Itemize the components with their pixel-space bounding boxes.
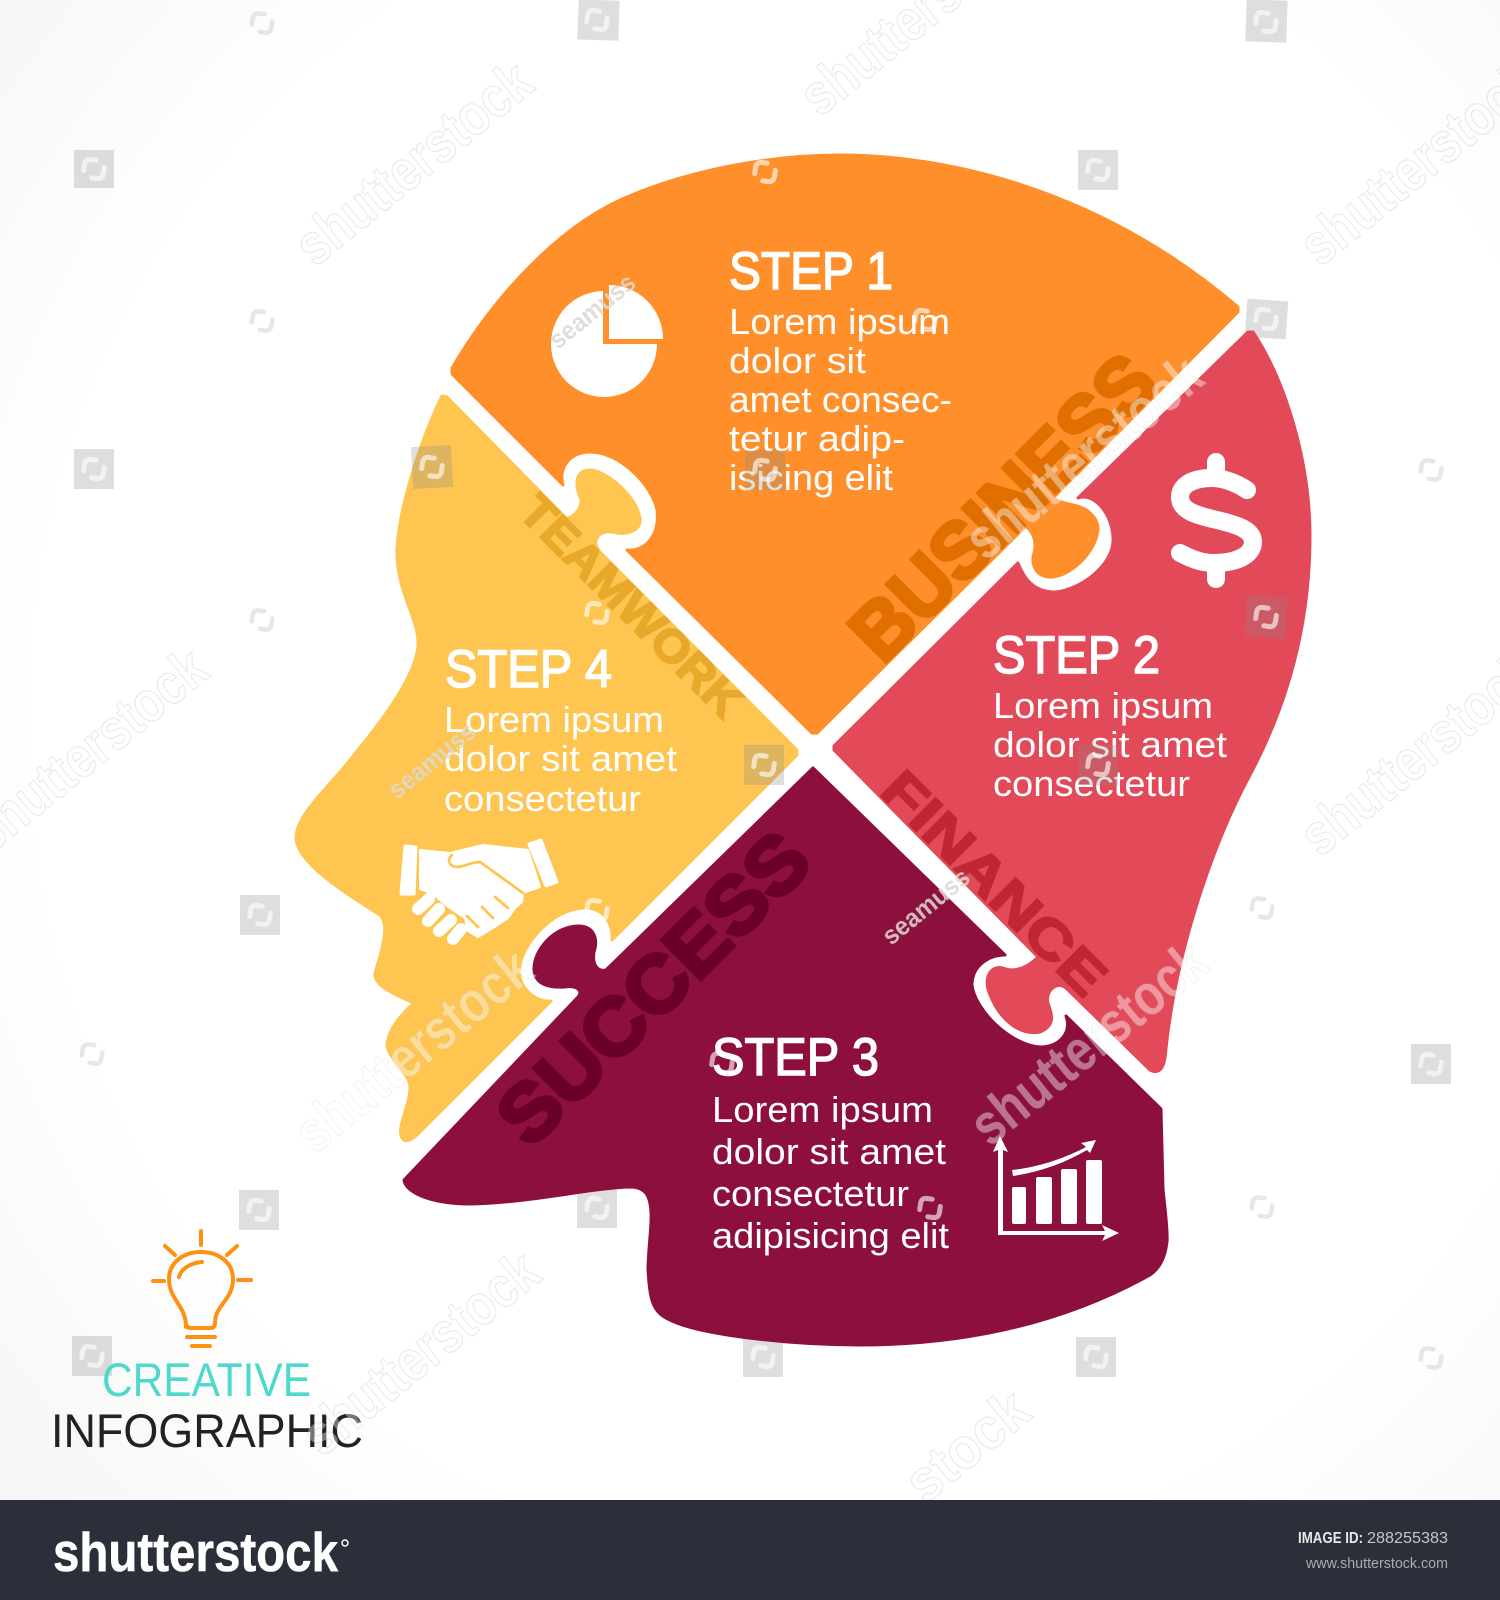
watermark overlay: shutterstock [282, 935, 545, 1165]
text block: step 4 [444, 699, 677, 819]
panel: step 1 orange puzzle piece [452, 155, 1238, 733]
footer logo: shutterstock: shutterstock [53, 1521, 338, 1583]
watermark overlay: stock [892, 1376, 1043, 1515]
label: TEAMWORK: TEAMWORK [510, 484, 753, 728]
panel: step 2 red puzzle piece [834, 332, 1310, 1072]
text block: step 1: Lorem ipsum [729, 301, 950, 342]
text block: step 4: Lorem ipsum [444, 699, 664, 740]
background watermark tiles [72, 0, 1451, 1377]
image id: IMAGE ID: [1298, 1530, 1363, 1547]
text block: step 3: Lorem ipsum [712, 1089, 933, 1130]
heading: step 2: STEP 2 [993, 626, 1160, 685]
heading: step 3: STEP 3 [712, 1028, 879, 1087]
text block: step 1 [729, 301, 952, 498]
logo: creative infographic [51, 1231, 363, 1457]
text block: step 3: adipisicing elit [712, 1215, 949, 1256]
text block: step 2: consectetur [993, 763, 1190, 804]
watermark overlay: seamuss [382, 716, 482, 805]
label: BUSINESS: BUSINESS [832, 336, 1174, 678]
text block: step 3: consectetur [712, 1173, 909, 1214]
watermark overlay: shutterstock [289, 1238, 552, 1468]
label: FINANCE: FINANCE [870, 759, 1118, 1008]
text block: step 3: dolor sit amet [712, 1131, 946, 1172]
website url: www.shutterstock.com [1305, 1555, 1448, 1572]
image id: 288255383 [1367, 1530, 1448, 1547]
text block: step 1: dolor sit [729, 340, 866, 381]
text block: step 3 [712, 1089, 949, 1256]
icon: pie chart [551, 285, 663, 397]
text: creative: CREATIVE [102, 1353, 311, 1406]
label: SUCCESS: SUCCESS [479, 814, 827, 1162]
text block: step 1: isicing elit [729, 457, 893, 498]
watermark overlay: shutterstock [957, 928, 1220, 1158]
text block: step 1: amet consec- [729, 379, 952, 420]
icon: growth bar chart [993, 1136, 1119, 1241]
text block: step 4: consectetur [444, 778, 641, 819]
text block: step 1: tetur adip- [729, 418, 905, 459]
watermark overlay: shutterstock [282, 48, 545, 278]
text block: step 4: dolor sit amet [444, 738, 677, 779]
text block: step 2: Lorem ipsum [993, 685, 1213, 726]
text block: step 2 [993, 685, 1227, 804]
watermark overlay: seamuss [543, 267, 641, 355]
heading: step 4: STEP 4 [445, 640, 612, 699]
icon: light bulb [153, 1231, 251, 1346]
text: infographic: INFOGRAPHIC [51, 1404, 363, 1457]
watermark overlay: seamuss [876, 862, 976, 951]
text block: step 2: dolor sit amet [993, 724, 1227, 765]
icon: registered mark [342, 1540, 348, 1546]
footer bar [0, 1500, 1500, 1600]
heading: step 1: STEP 1 [729, 242, 893, 301]
icon: handshake [401, 840, 557, 939]
watermark overlay: shutterstock [952, 342, 1215, 572]
panel: step 3 maroon puzzle piece [404, 768, 1167, 1345]
panel: step 4 yellow puzzle piece [296, 396, 797, 1141]
icon: dollar sign [1180, 462, 1253, 579]
